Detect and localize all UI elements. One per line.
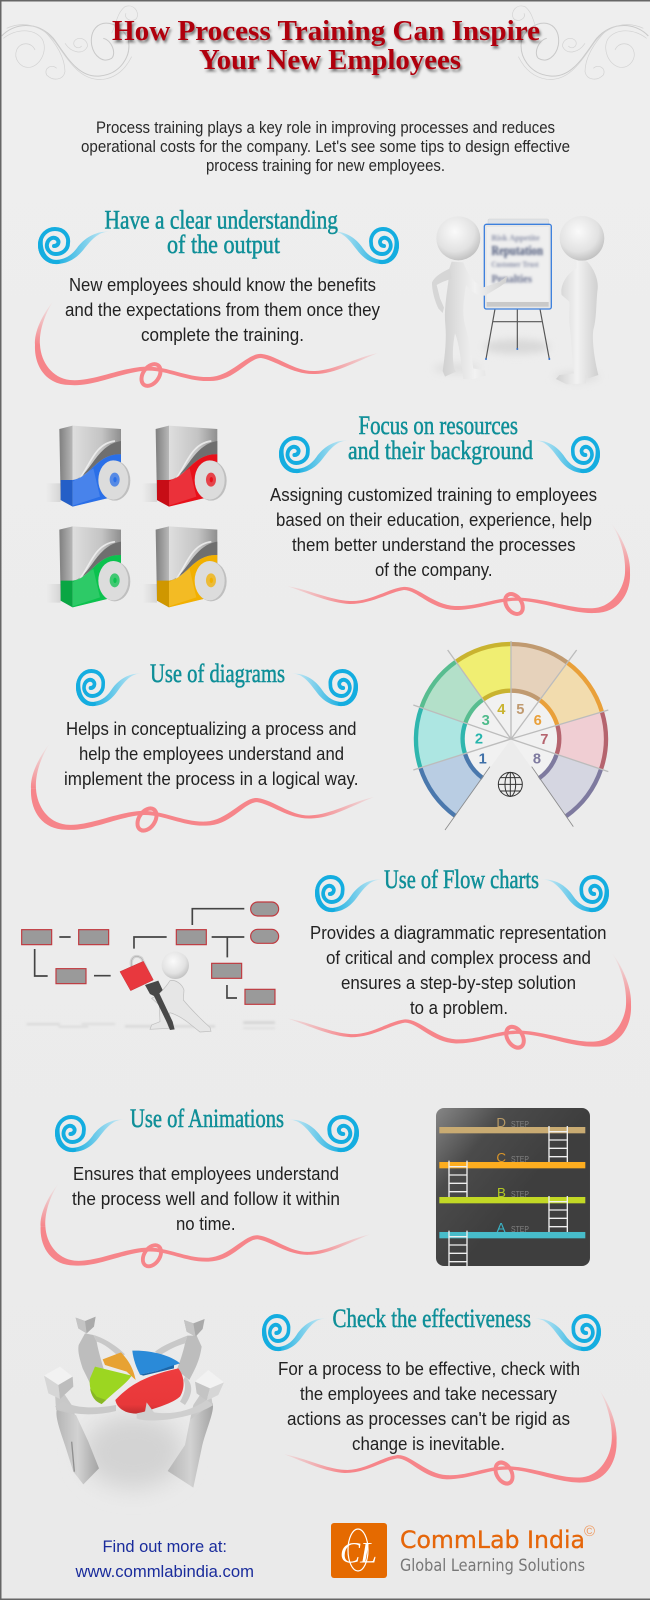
panel: use of animations (41, 1104, 590, 1270)
body text: the employees and take necessary (300, 1384, 557, 1404)
body text (64, 719, 358, 789)
heading: Check the effectiveness (332, 1304, 531, 1333)
swirls and ribbon (262, 1316, 617, 1487)
swirls and ribbon (288, 877, 631, 1051)
panel: check the effectiveness (44, 1304, 617, 1488)
illustration: step ladder board: STEP (511, 1224, 529, 1234)
body text: the process well and follow it within (72, 1189, 340, 1209)
body text: and the expectations from them once they (65, 300, 380, 320)
logo: CommLab India (331, 1523, 595, 1578)
footer link text: Find out more at: (102, 1537, 227, 1556)
intro paragraph (81, 119, 570, 175)
body text: Helps in conceptualizing a process and (66, 719, 356, 739)
swirls and ribbon (31, 671, 374, 834)
panel: use of diagrams (31, 641, 608, 834)
heading: Use of Flow charts (384, 865, 539, 894)
body text (270, 485, 597, 580)
footer link text (75, 1537, 254, 1581)
illustration: step ladder board: STEP (511, 1154, 529, 1164)
intro paragraph: operational costs for the company. Let's see some tips to design effective (81, 138, 570, 156)
illustration: step ladder board: A (497, 1220, 506, 1235)
chart: eight-segment wheel: 2 (475, 731, 483, 747)
illustration: flow chart with figure and wrench (22, 902, 279, 1032)
title: How Process Training Can Inspire (112, 16, 540, 47)
illustration: two figures at a flip chart: Customer Trust (491, 260, 539, 269)
heading: Have a clear understanding (104, 206, 338, 234)
logo tagline: Global Learning Solutions (400, 1556, 585, 1575)
body text: of the company. (375, 560, 492, 580)
intro paragraph: Process training plays a key role in improving processes and reduces (96, 119, 555, 137)
heading: Focus on resources (358, 411, 518, 440)
illustration: two figures at a flip chart: Risk Appetite (491, 232, 540, 242)
illustration: step ladder board: D (496, 1115, 506, 1130)
swirls and ribbon (35, 229, 399, 389)
body text: For a process to be effective, check with (278, 1359, 580, 1379)
chart: eight-segment wheel: 5 (516, 702, 524, 718)
heading: Use of diagrams (150, 659, 285, 688)
body text: of critical and complex process and (326, 948, 591, 968)
body text: implement the process in a logical way. (64, 769, 358, 789)
body text: actions as processes can't be rigid as (287, 1409, 570, 1429)
chart: eight-segment wheel: 6 (534, 713, 542, 729)
chart: eight-segment wheel: 8 (533, 751, 541, 767)
header ornament: right flourish (512, 6, 648, 79)
swirls and ribbon (41, 1117, 370, 1270)
body text: them better understand the processes (292, 535, 576, 555)
body text: to a problem. (410, 998, 508, 1018)
body text: Ensures that employees understand (73, 1164, 339, 1184)
swirls and ribbon (279, 438, 630, 617)
panel: use of flow charts (22, 865, 631, 1051)
heading: and their background (348, 436, 533, 465)
body text: help the employees understand and (79, 744, 344, 764)
illustration: two figures at a flip chart: Reputation (491, 243, 543, 258)
heading: of the output (167, 230, 281, 259)
copyright mark: © (584, 1523, 595, 1540)
illustration: step ladder board: B (497, 1185, 506, 1200)
body text: ensures a step-by-step solution (341, 973, 576, 993)
illustration: four figures holding pie chart (44, 1317, 224, 1488)
illustration: step ladder board: C (496, 1150, 506, 1165)
illustration: four software boxes (46, 426, 227, 607)
logo mark: CL (340, 1536, 377, 1570)
chart: eight-segment wheel: 1 (479, 752, 487, 768)
body text: Assigning customized training to employees (270, 485, 597, 505)
title: Your New Employees (199, 45, 461, 76)
chart: eight-segment wheel (413, 641, 608, 830)
title (112, 16, 540, 76)
logo mark (331, 1523, 387, 1578)
illustration: two figures at a flip chart: Penalties (491, 273, 533, 285)
body text (72, 1164, 340, 1234)
chart: eight-segment wheel: 4 (497, 702, 506, 718)
header ornament: left flourish (2, 6, 138, 79)
illustration: step ladder board (436, 1108, 590, 1266)
illustration: step ladder board: STEP (511, 1189, 529, 1199)
body text: New employees should know the benefits (69, 275, 376, 295)
body text: no time. (176, 1214, 236, 1234)
heading (104, 206, 338, 259)
body text (310, 923, 606, 1018)
body text (65, 275, 380, 345)
heading: Use of Animations (130, 1104, 284, 1133)
chart: eight-segment wheel: 3 (482, 713, 490, 729)
illustration: step ladder board: STEP (511, 1119, 529, 1129)
heading (348, 411, 533, 465)
body text: complete the training. (141, 325, 304, 345)
body text: Provides a diagrammatic representation (310, 923, 606, 943)
panel: focus on resources and their background (46, 411, 630, 617)
logo wordmark: CommLab India (400, 1526, 585, 1554)
body text: change is inevitable. (352, 1434, 505, 1454)
footer link text: www.commlabindia.com (75, 1562, 254, 1581)
body text (278, 1359, 580, 1454)
intro paragraph: process training for new employees. (206, 157, 445, 175)
illustration: two figures at a flip chart (432, 216, 604, 384)
panel: clear understanding of the output (35, 206, 604, 389)
body text: based on their education, experience, help (276, 510, 592, 530)
chart: eight-segment wheel: 7 (540, 732, 548, 748)
